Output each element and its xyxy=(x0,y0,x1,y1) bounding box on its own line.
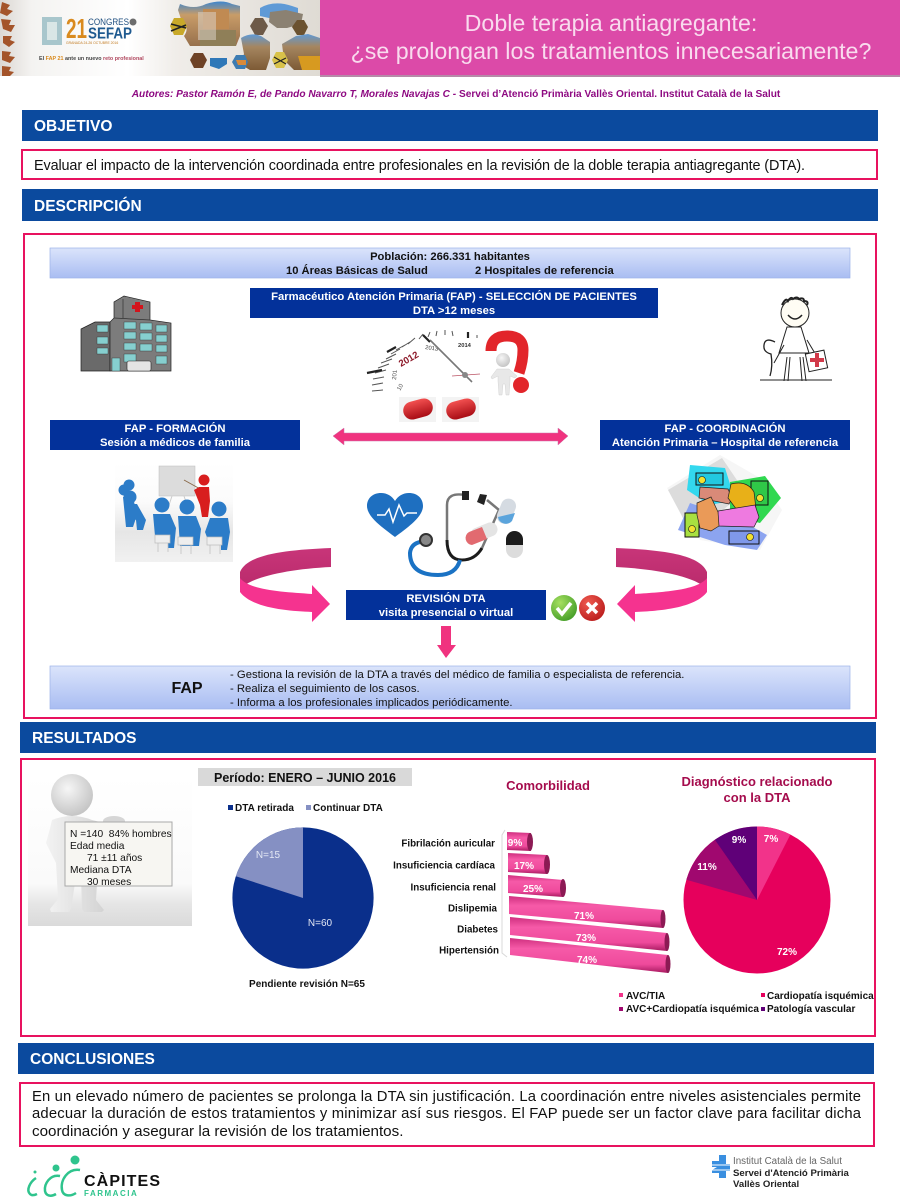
logo: Capites Farmacia: FARMACIA xyxy=(84,1189,138,1198)
patient data sign: N =140 84% hombres xyxy=(70,829,172,840)
section heading: resultados xyxy=(20,722,876,753)
pie chart: diagnostico: 7% xyxy=(764,834,778,845)
header banner xyxy=(0,0,900,77)
box: seleccion de pacientes xyxy=(250,288,658,318)
box: revision DTA: visita presencial o virtual xyxy=(379,607,513,619)
legend: DTA pie: Continuar DTA xyxy=(313,803,383,814)
patient data sign: Edad media xyxy=(70,841,125,852)
title banner: Doble terapia antiagregante: xyxy=(465,10,757,36)
box: revision DTA xyxy=(346,590,546,620)
icon: calendar dial: 2014 xyxy=(458,343,472,349)
text block: conclusiones xyxy=(20,1083,874,1146)
icon: stethoscope and pills xyxy=(410,491,523,575)
bar chart: comorbilidad: Fibrilación auricular xyxy=(401,838,495,850)
icon: calendar dial xyxy=(367,330,480,392)
box: coordinacion: Atención Primaria – Hospital de referencia xyxy=(612,437,839,449)
icon: calendar dial: 10 xyxy=(397,383,405,392)
bar chart: comorbilidad: Hipertensión xyxy=(439,946,499,956)
legend: diagnostico: AVC+Cardiopatía isquémica xyxy=(626,1004,759,1015)
text block: objetivo: Evaluar el impacto de la intervención coordinada entre profesionales en la revisión de la doble terapia antiagregante (DTA). xyxy=(34,158,805,174)
pie chart: diagnostico xyxy=(684,826,830,974)
pie chart: DTA xyxy=(232,827,374,969)
FAP tasks banner xyxy=(50,666,850,709)
bar chart: comorbilidad: Insuficiencia renal xyxy=(411,882,496,894)
figure holding patient data sign xyxy=(28,774,192,926)
population banner: Población: 266.331 habitantes xyxy=(370,251,530,263)
section heading: descripcion: DESCRIPCIÓN xyxy=(34,197,142,215)
box: coordinacion xyxy=(600,420,850,450)
icon: heart with pulse xyxy=(367,493,423,537)
logo: Institut Catala de la Salut xyxy=(712,1155,850,1190)
patient data sign: 30 meses xyxy=(87,877,131,888)
bar chart: comorbilidad: 17% xyxy=(514,861,534,872)
box: formacion: FAP - FORMACIÓN xyxy=(124,422,226,435)
icon: approve and reject marks xyxy=(551,595,605,621)
icon: question mark figure xyxy=(491,336,529,395)
pie chart: diagnostico: 9% xyxy=(732,835,746,846)
legend: DTA pie xyxy=(228,803,383,814)
box: coordinacion: FAP - COORDINACIÓN xyxy=(664,422,786,435)
FAP tasks banner: - Gestiona la revisión de la DTA a través del médico de familia o especialista de referencia. xyxy=(230,669,684,681)
logo: congress SEFAP: SEFAP xyxy=(88,26,132,42)
patient data sign xyxy=(65,822,172,888)
section heading: conclusiones xyxy=(18,1043,874,1074)
bar chart: comorbilidad: 9% xyxy=(508,838,522,849)
bar chart: comorbilidad: 74% xyxy=(577,955,597,966)
icon: doctor stick figure xyxy=(760,298,832,381)
logo: Institut Catala de la Salut: Servei d'Atenció Primària xyxy=(733,1168,850,1179)
icon: red capsules xyxy=(399,396,479,422)
arrow: curved from coordinacion xyxy=(616,548,707,622)
heading: diagnostico xyxy=(682,774,833,805)
box: formacion xyxy=(50,420,300,450)
heading: diagnostico: con la DTA xyxy=(724,790,791,805)
pie chart: DTA: N=15 xyxy=(256,850,281,861)
logo: Institut Catala de la Salut: Vallès Oriental xyxy=(733,1179,799,1190)
text block: conclusiones: coordinación y asegurar la revisión de los tratamientos. xyxy=(32,1123,403,1140)
panel: resultados xyxy=(21,759,875,1036)
legend: diagnostico xyxy=(619,991,874,1015)
FAP tasks banner: - Realiza el seguimiento de los casos. xyxy=(230,683,420,695)
arrow: curved from formacion xyxy=(240,548,331,622)
heading: periodo xyxy=(198,768,412,786)
bar chart: comorbilidad: 73% xyxy=(576,933,596,944)
logo: Institut Catala de la Salut: Institut Català de la Salut xyxy=(733,1156,842,1167)
logo: Capites Farmacia: CÀPITES xyxy=(84,1171,160,1190)
icon: training session xyxy=(115,462,233,562)
text block: conclusiones: adecuar la duración de estos tratamientos y minimizar así sus riesgos. El FAP puede ser un factor clave para facilitar dicha xyxy=(32,1106,862,1122)
legend: diagnostico: Patología vascular xyxy=(767,1004,855,1015)
bar chart: comorbilidad: Diabetes xyxy=(457,924,499,936)
icon: hospital xyxy=(81,296,171,371)
logo: congress SEFAP xyxy=(39,13,144,62)
bar chart: comorbilidad: Dislipemia xyxy=(448,904,498,914)
authors line: Autores: Pastor Ramón E, de Pando Navarro T, Morales Navajas C - Servei d’Atenció Primària Vallès Oriental. Institut Català de la Salut xyxy=(131,89,781,100)
heading: comorbilidad: Comorbilidad xyxy=(506,778,590,793)
section heading: objetivo: OBJETIVO xyxy=(34,118,112,135)
icon: decorative leaf border xyxy=(0,2,15,76)
bar chart: comorbilidad: 71% xyxy=(574,911,594,922)
box: formacion: Sesión a médicos de familia xyxy=(100,437,251,449)
heading: diagnostico: Diagnóstico relacionado xyxy=(682,774,833,789)
panel: descripcion xyxy=(24,234,876,718)
box: seleccion de pacientes: Farmacéutico Atención Primaria (FAP) - SELECCIÓN DE PACIENTES xyxy=(271,290,637,303)
legend: DTA pie: DTA retirada xyxy=(235,803,294,814)
arrow: down to FAP xyxy=(437,626,456,658)
pie chart: DTA: N=60 xyxy=(308,918,333,929)
caption: pending review: Pendiente revisión N=65 xyxy=(249,979,365,990)
patient data sign: Mediana DTA xyxy=(70,865,132,876)
logo: congress SEFAP: CONGRES xyxy=(88,17,129,28)
logo: congress SEFAP: El FAP 21 ante un nuevo reto profesional xyxy=(39,56,144,62)
bar chart: comorbilidad: Insuficiencia cardíaca xyxy=(393,860,496,872)
section heading: resultados: RESULTADOS xyxy=(32,730,136,747)
pie chart: diagnostico: 72% xyxy=(777,947,797,958)
legend: diagnostico: Cardiopatía isquémica xyxy=(767,991,874,1002)
population banner xyxy=(50,248,850,278)
section heading: objetivo xyxy=(22,110,878,141)
logo: Capites Farmacia xyxy=(28,1156,160,1198)
text block: conclusiones: En un elevado número de pacientes se prolonga la DTA sin justificación. La coordinación entre niveles asistenciales permite xyxy=(32,1089,861,1105)
patient data sign: 71 ±11 años xyxy=(87,853,142,864)
heading: periodo: Período: ENERO – JUNIO 2016 xyxy=(214,771,396,785)
icon: calendar dial: 2013 xyxy=(425,345,438,353)
population banner: 10 Áreas Básicas de Salud xyxy=(286,264,428,277)
icon: calendar dial: 201 xyxy=(392,369,399,380)
pie chart: diagnostico: 11% xyxy=(697,862,717,873)
section heading: descripcion xyxy=(22,189,878,221)
FAP tasks banner: - Informa a los profesionales implicados periódicamente. xyxy=(230,697,513,709)
arrow: double headed xyxy=(333,428,568,445)
bar chart: comorbilidad xyxy=(393,830,670,973)
title banner: ¿se prolongan los tratamientos innecesariamente? xyxy=(351,38,871,64)
legend: diagnostico: AVC/TIA xyxy=(626,991,665,1002)
icon: joined hands xyxy=(667,455,782,550)
box: seleccion de pacientes: DTA >12 meses xyxy=(413,305,495,317)
bar chart: comorbilidad: 25% xyxy=(523,884,543,895)
icon: calendar dial: 2012 xyxy=(397,350,421,370)
logo: congress SEFAP: 21 xyxy=(66,13,87,44)
title banner xyxy=(320,0,900,77)
FAP tasks banner: FAP xyxy=(171,680,203,697)
text block: objetivo xyxy=(22,150,877,179)
box: revision DTA: REVISIÓN DTA xyxy=(406,592,486,605)
population banner: 2 Hospitales de referencia xyxy=(475,265,614,277)
section heading: conclusiones: CONCLUSIONES xyxy=(30,1051,155,1068)
image: Granada photo collage xyxy=(170,2,320,70)
logo: congress SEFAP: GRANADA 24-26 OCTUBRE 2016 xyxy=(66,41,118,45)
